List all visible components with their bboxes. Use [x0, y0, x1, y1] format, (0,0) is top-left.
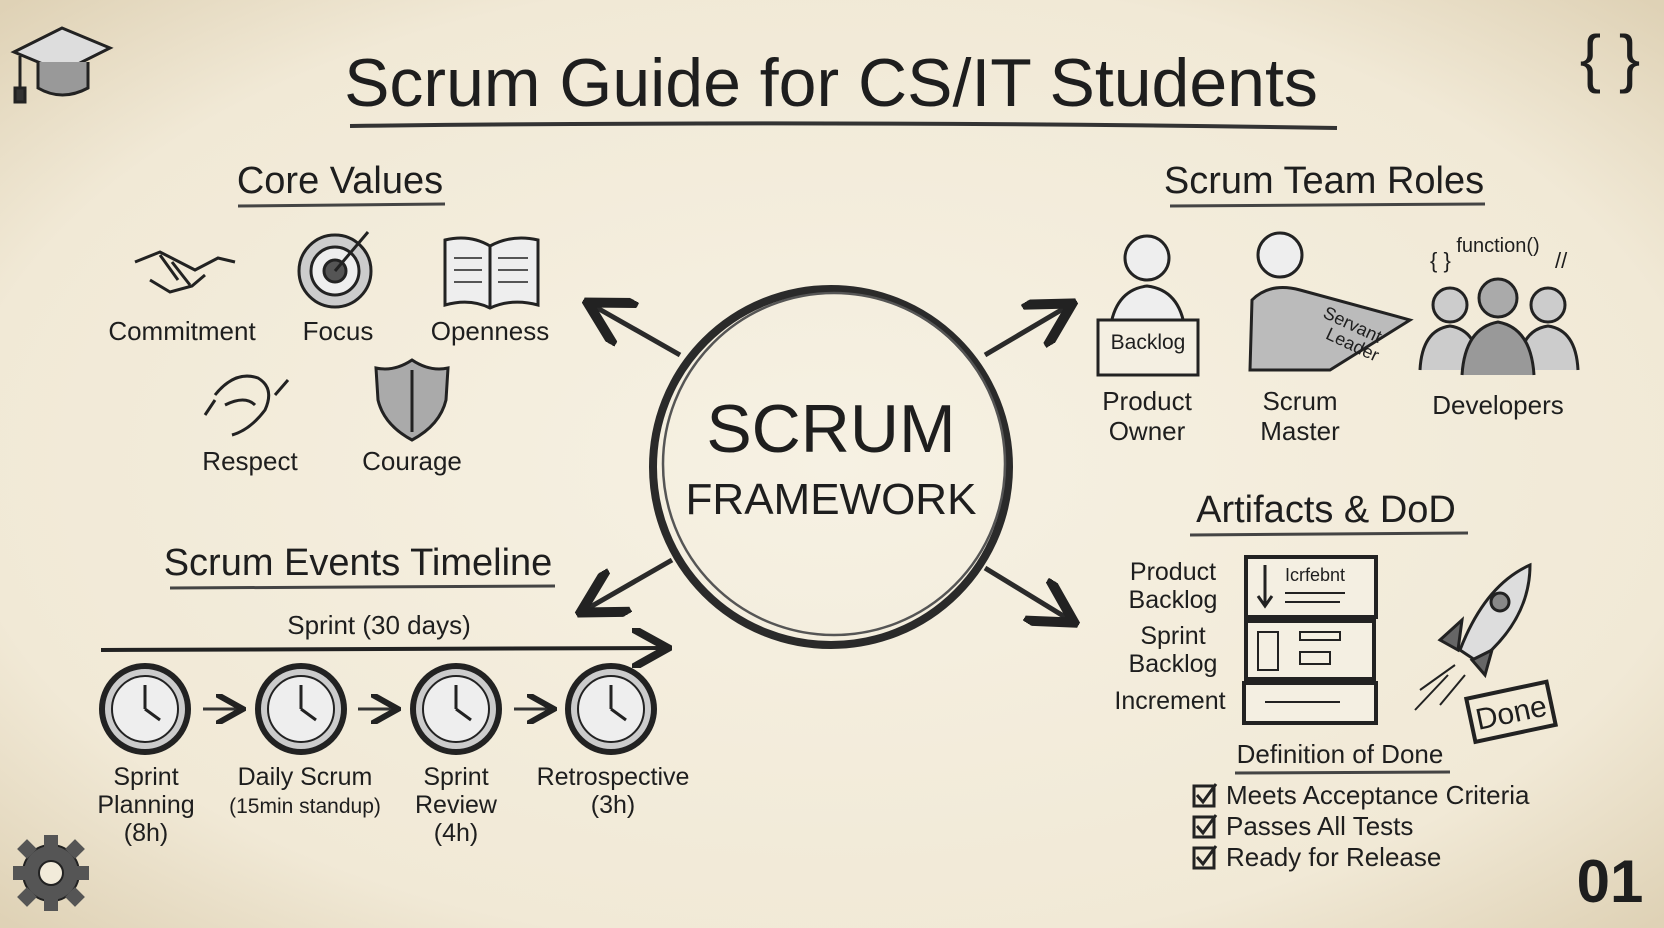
developers: //: [1555, 248, 1568, 273]
panel: scrum events timeline: Review: [415, 791, 498, 819]
panel: core values: Commitment: [108, 316, 256, 346]
definition of done: Ready for Release: [1226, 842, 1441, 872]
panel: artifacts & dod: Product: [1130, 558, 1216, 586]
panel: artifacts & dod: Sprint: [1140, 622, 1206, 650]
panel: artifacts & dod: Backlog: [1129, 586, 1217, 614]
panel: scrum team roles: [1098, 160, 1578, 446]
panel: scrum events timeline: Planning: [97, 791, 195, 819]
panel: scrum events timeline: (15min standup): [229, 795, 381, 818]
panel: core values: [108, 160, 549, 476]
panel: scrum team roles: Owner: [1109, 416, 1186, 446]
icon: binary 01: 01: [1577, 848, 1643, 915]
title: Scrum Guide for CS/IT Students: [344, 45, 1318, 121]
small arrows: [203, 708, 551, 710]
artifact boxes: [1244, 557, 1376, 723]
definition of done: Meets Acceptance Criteria: [1226, 780, 1530, 810]
scrum master: Leader: [1323, 324, 1382, 365]
panel: scrum events timeline: (3h): [591, 791, 635, 819]
heading: artifacts: Artifacts & DoD: [1196, 489, 1456, 531]
panel: scrum team roles: Scrum: [1262, 386, 1338, 416]
icon: clasped hands: [205, 376, 288, 435]
panel: scrum team roles: Product: [1102, 386, 1193, 416]
icon: rocket: [1415, 565, 1530, 710]
developers: function(): [1456, 235, 1540, 257]
panel: scrum events timeline: Sprint: [423, 763, 489, 791]
icon: shield: [376, 360, 448, 440]
icon: target: [299, 232, 371, 307]
panel: scrum team roles: Master: [1260, 416, 1340, 446]
stamp: done: [1466, 682, 1556, 742]
heading: events: Scrum Events Timeline: [164, 542, 552, 584]
icon: handshake: [135, 252, 235, 292]
scrum master: Servant: [1320, 302, 1385, 347]
panel: scrum events timeline: (4h): [434, 819, 478, 847]
arrows from circle: [585, 305, 1070, 620]
panel: artifacts & dod: [1114, 489, 1556, 872]
icon: book: [445, 238, 538, 308]
central circle: scrum framework: [653, 289, 1009, 645]
product owner: [1098, 236, 1198, 375]
artifact boxes: Icrfebnt: [1285, 565, 1345, 585]
panel: scrum events timeline: (8h): [124, 819, 168, 847]
icon: gear: [13, 835, 89, 911]
panel: scrum events timeline: Retrospective: [537, 763, 689, 791]
definition of done: [1194, 739, 1530, 872]
panel: scrum events timeline: [97, 542, 689, 847]
central circle: scrum framework: SCRUM: [706, 391, 956, 467]
central circle: scrum framework: FRAMEWORK: [686, 475, 976, 524]
panel: core values: Respect: [202, 446, 298, 476]
panel: artifacts & dod: Increment: [1114, 687, 1226, 715]
panel: core values: Focus: [303, 316, 373, 346]
definition of done: Definition of Done: [1237, 739, 1443, 769]
stamp: done: Done: [1473, 690, 1550, 737]
panel: core values: Openness: [431, 316, 549, 346]
panel: core values: Courage: [362, 446, 462, 476]
panel: artifacts & dod: Backlog: [1129, 650, 1217, 678]
product owner: Backlog: [1111, 331, 1185, 354]
heading: roles: Scrum Team Roles: [1164, 160, 1484, 202]
developers: { }: [1430, 248, 1451, 273]
icon: braces: { }: [1580, 22, 1640, 94]
developers: [1420, 235, 1578, 375]
panel: scrum team roles: Developers: [1432, 390, 1564, 420]
clocks: [102, 666, 654, 752]
icon: graduation cap: [14, 28, 110, 102]
heading: core values: Core Values: [237, 160, 443, 202]
panel: scrum events timeline: Daily Scrum: [238, 763, 372, 791]
panel: scrum events timeline: Sprint: [113, 763, 179, 791]
scrum master: [1250, 233, 1410, 370]
definition of done: Passes All Tests: [1226, 811, 1413, 841]
sprint arrow: Sprint (30 days): [287, 610, 471, 640]
